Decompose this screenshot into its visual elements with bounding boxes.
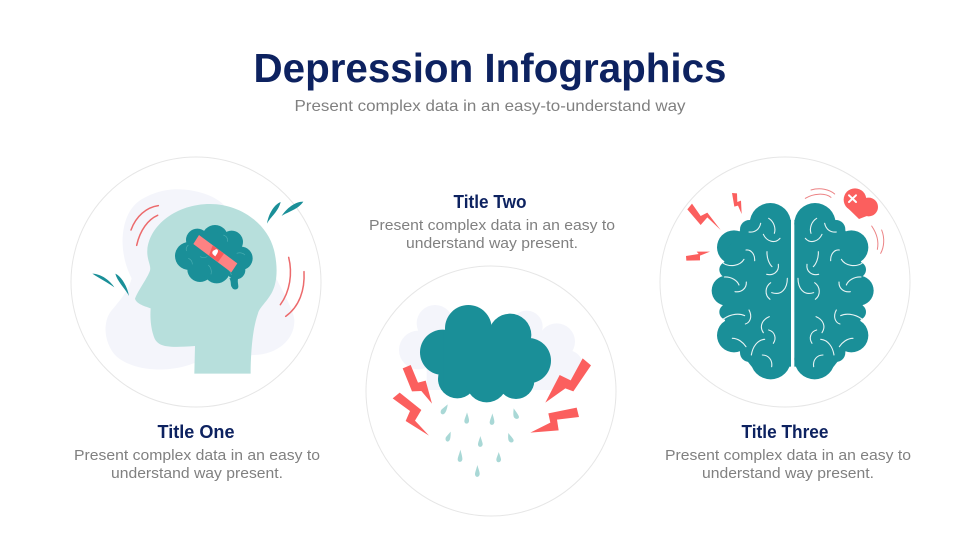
panel: title one illustration <box>71 157 321 407</box>
text: title three body: understand way present. <box>702 465 874 482</box>
storm cloud <box>420 305 551 402</box>
left brain hemisphere <box>712 203 791 379</box>
heading: title three: Title Three <box>742 422 828 442</box>
broken heart icon <box>844 188 878 219</box>
lightning left <box>393 365 432 436</box>
text: title three body: Present complex data in an easy to <box>665 447 911 464</box>
text: title two body: Present complex data in an easy to <box>369 217 615 234</box>
text: title one body: Present complex data in an easy to <box>74 447 320 464</box>
panel: title two illustration <box>366 266 616 516</box>
background cloud <box>399 305 583 390</box>
right brain hemisphere <box>794 203 874 379</box>
leaves left <box>92 274 129 296</box>
rain drops <box>441 404 519 477</box>
text: title one body <box>74 447 320 482</box>
red motion lines <box>805 189 884 253</box>
heading: title one: Title One <box>158 422 234 442</box>
head silhouette <box>135 204 277 374</box>
text: title three body <box>665 447 911 482</box>
heading: title two: Title Two <box>454 192 526 212</box>
subtitle: Present complex data in an easy-to-understand way <box>294 98 686 115</box>
red motion lines right <box>280 257 304 316</box>
panel: title three illustration <box>660 157 910 407</box>
background blob: head <box>106 189 294 369</box>
lightning right <box>530 358 591 433</box>
lightning bolts <box>686 193 742 261</box>
red motion lines left <box>131 206 158 245</box>
text: title two body <box>369 217 615 252</box>
text: title two body: understand way present. <box>406 235 578 252</box>
leaves right <box>267 202 303 224</box>
title: Depression Infographics <box>254 45 726 91</box>
text: title one body: understand way present. <box>111 465 283 482</box>
brain with bandage <box>175 225 253 290</box>
